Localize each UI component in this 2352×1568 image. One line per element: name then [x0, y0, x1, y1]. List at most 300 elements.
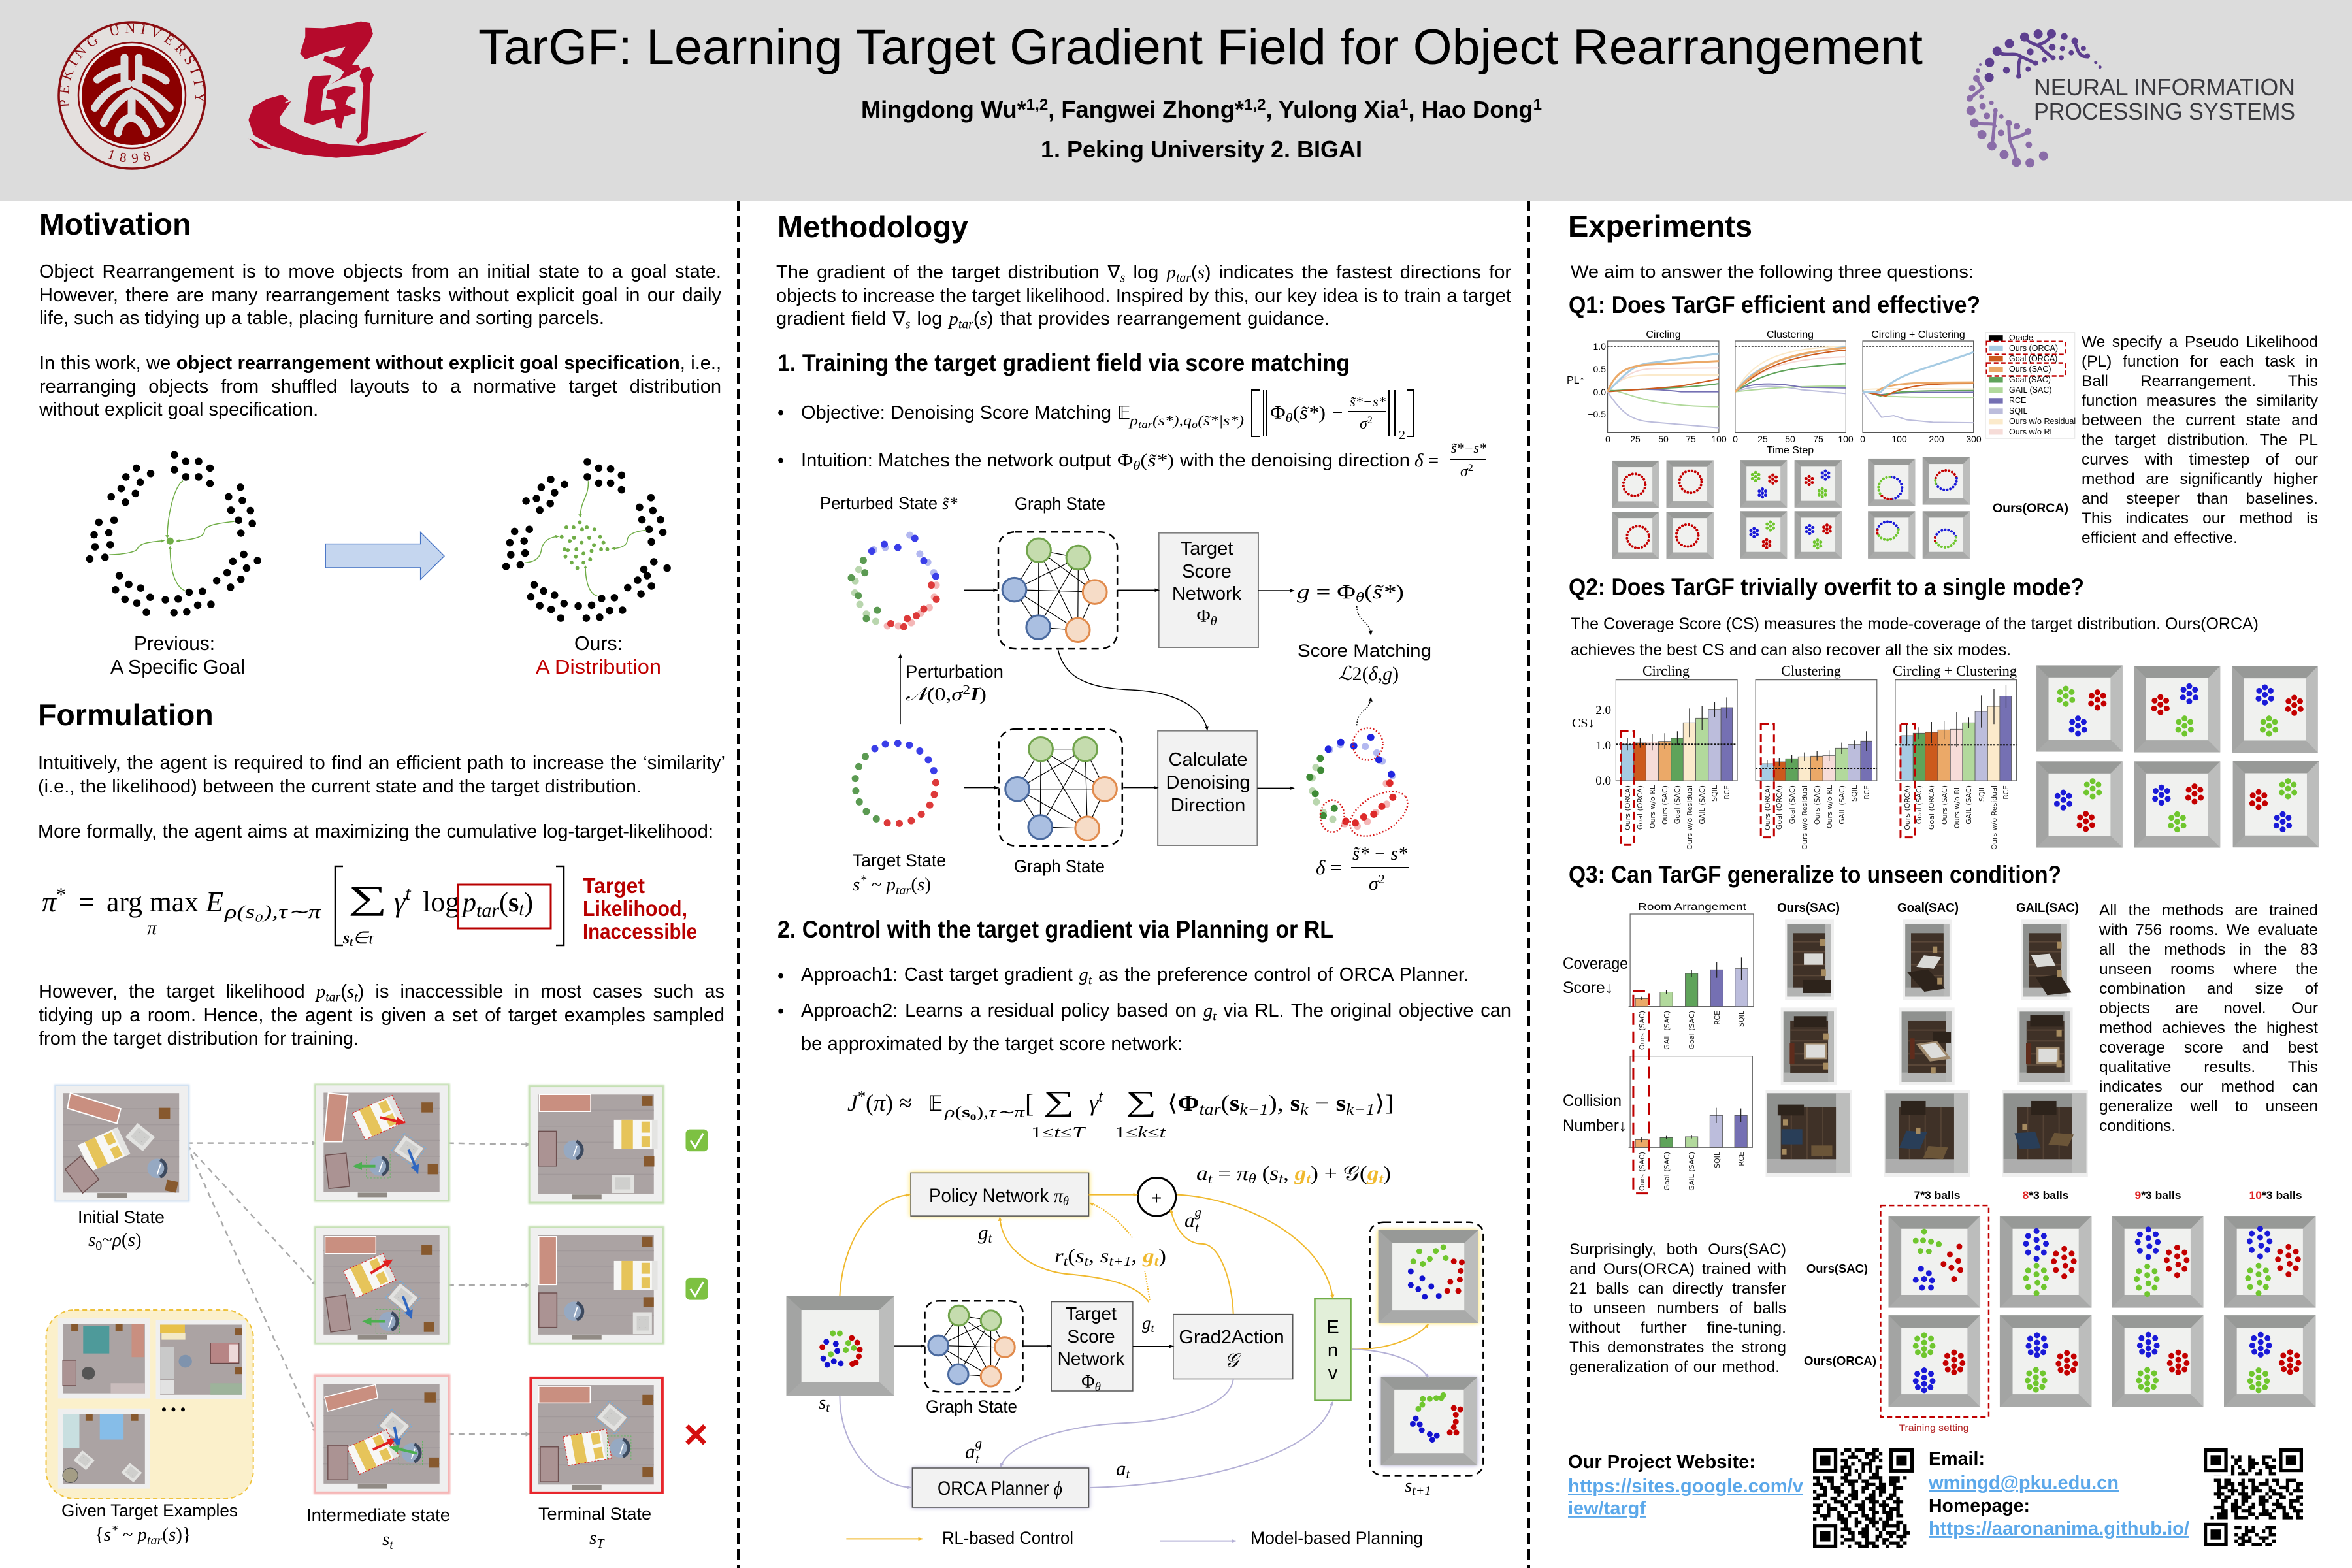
label: given target examples: * [111, 1523, 118, 1537]
bullet: intuition: 2 [1468, 463, 1473, 474]
figure: unseen ball numbers: Ours(ORCA) [1804, 1354, 1876, 1367]
affiliations: 1. Peking University 2. BIGAI [1041, 136, 1362, 163]
formula: objective: * [56, 884, 66, 906]
footer: email and homepage: Email: [1929, 1448, 1985, 1469]
chart: Q1 pseudo likelihood curves: 1.0 [1593, 341, 1606, 351]
authors: Mingdong Wu* [861, 96, 1025, 123]
chart: Q2 coverage score bars: RCE [1723, 785, 1731, 800]
formula: objective: ∑ [348, 879, 387, 916]
chart: Q1 pseudo likelihood curves: Ours w/o Residual [2009, 417, 2076, 426]
room: terminal success 1 [531, 1086, 662, 1202]
chart: Q3 room arrangement bars: Ours (SAC) [1638, 1011, 1646, 1050]
label: env [1326, 1317, 1339, 1384]
label: perturbed state: Perturbed State s̃* [820, 493, 957, 513]
chart: Q2 coverage score bars: Goal (SAC) [1915, 785, 1923, 824]
chart: Q1 pseudo likelihood curves: RCE [2009, 396, 2026, 405]
label: calculate denoising direction [1166, 749, 1250, 816]
chart: Q2 coverage score bars: Goal (ORCA) [1927, 785, 1936, 830]
text: Q1 paragraph: Ball Rearrangement. This [2082, 372, 2318, 390]
label: target state: tar [896, 883, 911, 898]
formula: J star: ∑ [1043, 1086, 1074, 1117]
formula: J star: ρ(s₀),τ∼π [944, 1104, 1025, 1121]
bullet: intuition: • [777, 450, 784, 471]
chart: Q1 pseudo likelihood curves: 25 [1757, 434, 1768, 444]
text: motivation paragraph 1: life, such as tidying up a table, placing furniture and sorting parcels. [39, 308, 604, 329]
label: gt: g [978, 1221, 988, 1244]
room: terminal success 2 [531, 1228, 662, 1343]
label: reward: , [1132, 1245, 1143, 1267]
formula: objective: arg max [106, 886, 199, 918]
authors: , Hao Dong [1408, 96, 1533, 123]
label: score matching: Score Matching [1298, 641, 1431, 661]
panel: right column, Experiments [1563, 209, 2319, 1548]
label: gt small: t [1151, 1322, 1155, 1335]
formula: delta: 2 [1379, 872, 1385, 887]
chart: Q2 coverage score bars: 0.0 [1595, 774, 1611, 788]
formula: J star: t [1098, 1088, 1103, 1105]
bullet: approach 1: • [777, 966, 784, 987]
formula: objective: t [519, 900, 525, 920]
text: formulation intro: Intuitively, the agent is required to find an efficient path to increase the ‘similarity’ [38, 753, 725, 774]
label: given target examples: tar [147, 1533, 162, 1548]
footer: project website [1568, 1452, 1803, 1519]
formula: objective: tar [476, 900, 499, 921]
chart: Q2 coverage score bars: Ours w/o RL [1825, 785, 1834, 828]
footer: email and homepage: https://aaronanima.github.io/ [1929, 1518, 2189, 1539]
label: reward: ( [1068, 1245, 1075, 1267]
text: Q3 paragraph: conditions. [2099, 1117, 2176, 1135]
text: motivation paragraph 1: Object Rearrangement is to move objects from an initial state to a goal state. [39, 261, 721, 282]
label: score matching: ℒ2(δ,g) [1338, 663, 1399, 685]
formula: objective: π [147, 917, 157, 939]
label: grad2action [1179, 1327, 1284, 1371]
text: Q1 paragraph: efficient and effective. [2082, 529, 2238, 547]
chart: Q1 pseudo likelihood curves: Clustering [1767, 329, 1814, 340]
label: reward: ) [1158, 1245, 1166, 1267]
label: terminal state: Terminal State [538, 1504, 651, 1524]
text: Q3 paragraph: combination and size of [2099, 980, 2318, 998]
chart: Q3 room arrangement bars: GAIL (SAC) [1663, 1011, 1671, 1050]
figure: unseen ball numbers: 7*3 balls [1914, 1189, 1960, 1201]
figure: Q3 3D room results: Ours(SAC) [1777, 901, 1840, 915]
chart: Q2 coverage score bars: RCE [2002, 785, 2010, 800]
callout: target likelihood inaccessible: Inaccessible [583, 919, 697, 943]
formula: action: θ [1249, 1171, 1256, 1186]
chart: Q2 coverage score bars: Ours w/o RL [1953, 785, 1961, 828]
label: reward: , [1088, 1245, 1100, 1267]
box: target score network [1051, 1302, 1133, 1391]
chart: Q2 coverage score bars: GAIL (SAC) [1698, 785, 1707, 825]
bullet: objective: 2 [1367, 415, 1373, 426]
text: Q3 paragraph: All the methods are trained [2099, 902, 2318, 919]
bullet: intuition: σ [1460, 463, 1468, 480]
graph state: target [999, 729, 1122, 846]
text: motivation paragraph 2: without explicit goal specification. [39, 399, 318, 420]
formula: objective: s [343, 928, 350, 947]
room row 1 [1785, 919, 2072, 1000]
formula: J star: s [1290, 1090, 1300, 1116]
bullet: intuition: θ [1133, 459, 1141, 473]
chart: Q1 pseudo likelihood curves: Oracle [2009, 333, 2033, 342]
chart: Q3 room arrangement bars: Room Arrangement [1638, 902, 1747, 913]
label: env: v [1328, 1363, 1338, 1384]
arrows: dashed transitions [187, 1143, 530, 1434]
legend: model-based planning: Model-based Planning [1250, 1528, 1423, 1548]
chart: Q1 pseudo likelihood curves: 75 [1813, 434, 1823, 444]
text: however paragraph [39, 980, 725, 1053]
authors: 1,2 [1026, 96, 1048, 114]
figure: unseen ball numbers [1804, 1189, 2316, 1433]
label: target score network: Φ [1196, 606, 1211, 627]
label: reward: g [1142, 1245, 1160, 1269]
label: perturbation: I [970, 684, 981, 705]
room: intermediate failure [316, 1377, 448, 1492]
label: initial state [78, 1207, 165, 1253]
chart: Q2 coverage score bars: Ours (ORCA) [1903, 785, 1912, 830]
label: calculate denoising direction: Calculate [1169, 749, 1247, 770]
chart: Q1 pseudo likelihood curves: GAIL (SAC) [2009, 385, 2052, 395]
room: next state RL [1379, 1230, 1478, 1323]
logo: NeurIPS: PROCESSING SYSTEMS [2034, 98, 2295, 125]
figure: Q1 ball rooms [1612, 457, 2068, 559]
chart: Q2 coverage score bars: Ours (SAC) [1661, 785, 1669, 825]
text: Q3 paragraph: all the methods in the 83 [2099, 941, 2318, 958]
label: target state: s) [917, 874, 931, 895]
label: previous: Previous: [134, 632, 215, 655]
text: Q2 description [1571, 615, 2259, 659]
text: surprisingly paragraph: 21 balls can directly transfer [1569, 1280, 1786, 1298]
chart: Q1 pseudo likelihood curves: 100 [1711, 434, 1727, 444]
label: target score network: Score [1182, 561, 1232, 582]
bullet: intuition: with the denoising direction [1179, 450, 1410, 471]
label: gt small: g [1142, 1313, 1151, 1333]
authors: , Yulong Xia [1266, 96, 1400, 123]
label: target score network small: Score [1067, 1326, 1115, 1347]
label: reward: t [1064, 1254, 1068, 1269]
text: motivation paragraph 1: However, there are many rearrangement tasks without explicit goal in our daily [39, 285, 721, 306]
chart: Q1 pseudo likelihood curves [1567, 329, 2076, 456]
chart: Q3 room arrangement bars: RCE [1713, 1011, 1722, 1025]
diagram: ours distribution dots [506, 462, 667, 678]
text: formulation intro [38, 752, 725, 801]
header band [0, 0, 2352, 201]
bullet: approach 2 [777, 1000, 1513, 1058]
label: given target examples [61, 1501, 238, 1548]
label: orca planner: ORCA Planner ϕ [938, 1478, 1062, 1499]
icon: QR code homepage [2204, 1448, 2303, 1546]
chart: Q3 room arrangement bars [1563, 902, 1754, 1194]
text: surprisingly paragraph: to unseen numbers of balls [1569, 1299, 1786, 1317]
bullet: objective: − [1332, 402, 1343, 423]
footer: project website: https://sites.google.com/v [1568, 1476, 1803, 1497]
text: motivation paragraph 2: In this work, we object rearrangement without explicit goal specification, i.e., [39, 353, 721, 374]
label: target state: ( [911, 874, 917, 895]
chart: Q1 pseudo likelihood curves: Goal (ORCA) [2009, 354, 2057, 363]
formula: J star: − [1308, 1090, 1336, 1116]
arrows: model-based planning [840, 1349, 1428, 1488]
label: initial state: ~ [102, 1230, 112, 1250]
figure: Q2 six modes rooms [2036, 665, 2319, 848]
text: however paragraph: from the target distribution for training. [39, 1028, 359, 1049]
formula: J star: ( [1221, 1090, 1230, 1116]
chart: Q1 pseudo likelihood curves: 300 [1966, 434, 1982, 444]
label: action g bottom: t [975, 1451, 980, 1467]
text: Q2 description: The Coverage Score (CS) measures the mode-coverage of the target distribution. Ours(ORCA) [1571, 615, 2259, 633]
label: target score network: Network [1172, 583, 1242, 604]
chart: Q1 pseudo likelihood curves: −0.5 [1588, 409, 1606, 419]
text: Q3 paragraph: with 756 rooms. We evaluate [2099, 921, 2318, 939]
bullet: objective: s̃*) [1299, 402, 1325, 423]
text: Q1 paragraph: function measures the similarity [2082, 392, 2318, 410]
label: ours: A Distribution [536, 655, 661, 678]
legend box [1985, 333, 2075, 438]
formula: J star: 𝔼 [928, 1091, 943, 1116]
label: target state: s [853, 874, 860, 895]
label: grad2action: Grad2Action [1179, 1327, 1284, 1348]
label: st: s [819, 1392, 826, 1413]
formula: delta: σ [1369, 873, 1379, 894]
label: action g bottom: a [965, 1440, 975, 1463]
text: Q1 paragraph: the target distribution. The PL [2082, 431, 2318, 449]
diagram: previous specific goal dots [90, 455, 257, 678]
label: target score network small: Target [1066, 1303, 1117, 1324]
bullet: approach 2: be approximated by the target score network: [801, 1034, 1183, 1054]
label: given target examples: {s [95, 1524, 111, 1545]
figure: unseen ball numbers: Ours(SAC) [1806, 1262, 1868, 1275]
footer: project website: Our Project Website: [1568, 1452, 1756, 1473]
label: g equation: g = Φ [1297, 580, 1347, 603]
chart: Q1 pseudo likelihood curves: Goal (SAC) [2009, 375, 2051, 384]
text: however paragraph: tidying up a room. Hence, the agent is given a set of target examples sampled [39, 1005, 725, 1026]
chart: Q1 pseudo likelihood curves: 0 [1860, 434, 1865, 444]
formula: action: π [1237, 1162, 1247, 1184]
bullet: objective: s̃*−s* [1350, 393, 1386, 410]
figure: Q3 3D room results: Goal(SAC) [1897, 901, 1959, 915]
chart: Q1 pseudo likelihood curves: 0.5 [1593, 364, 1606, 374]
formula: action: ) + 𝒢( [1311, 1162, 1367, 1184]
authors: , Fangwei Zhong* [1048, 96, 1244, 123]
authors: 1 [1399, 96, 1408, 114]
text: methodology intro [776, 261, 1511, 335]
chart: Q1 pseudo likelihood curves: Circling [1646, 329, 1681, 340]
heading: Q3: Q3: Can TarGF generalize to unseen condition? [1569, 861, 2061, 888]
room row 2 [1781, 1007, 2073, 1085]
chart: Q1 pseudo likelihood curves: 200 [1929, 434, 1944, 444]
label: env: n [1328, 1340, 1338, 1361]
formula: action: t [1306, 1171, 1311, 1186]
label: previous: A Specific Goal [110, 655, 245, 678]
chart: Q1 pseudo likelihood curves: 50 [1658, 434, 1669, 444]
text: Q3 paragraph: qualitative results. This [2099, 1058, 2318, 1076]
label: target state [853, 851, 946, 898]
label: policy network: θ [1063, 1194, 1069, 1209]
chart: Q2 coverage score bars: Circling + Clustering [1893, 662, 2017, 679]
label: st: t [826, 1401, 830, 1415]
graph state [925, 1301, 1023, 1392]
heading: Experiments: Experiments [1568, 209, 1752, 243]
text: motivation paragraph 2: rearranging objects from shuffled layouts to a normative target distribution [39, 376, 721, 397]
bullet: approach 2: Approach2: Learns a residual policy based on gt via RL. The original objective can [801, 1000, 1511, 1024]
text: Q1 paragraph: method are significantly higher [2082, 470, 2318, 488]
label: reward: t+1 [1109, 1254, 1132, 1269]
label: terminal state: T [596, 1537, 605, 1551]
text: Q3 paragraph: generalize well to unseen [2099, 1098, 2318, 1115]
label: at: t [1126, 1466, 1130, 1482]
label: graph state: Graph State [926, 1397, 1017, 1416]
bullet: intuition: s̃*−s* [1451, 440, 1486, 456]
label: policy network: Policy Network π [929, 1185, 1064, 1207]
formula: objective [42, 866, 564, 949]
formula: action: ) [1383, 1162, 1391, 1184]
chart: Q2 coverage score bars: GAIL (SAC) [1838, 785, 1846, 825]
formula: action: t [1279, 1171, 1284, 1186]
text: surprisingly paragraph: Surprisingly, both Ours(SAC) [1569, 1241, 1786, 1258]
chart: Q2 coverage score bars: Clustering [1781, 662, 1841, 679]
label: target state: Target State [853, 851, 946, 870]
text: however paragraph: However, the target likelihood ptar(st) is inaccessible in most cases such as [39, 981, 725, 1005]
title: TarGF: Learning Target Gradient Field for Object Rearrangement [478, 20, 1923, 75]
callout: target likelihood inaccessible: Likelihood, [583, 896, 687, 921]
arrows: black flow [894, 1345, 1173, 1347]
room: initial state [56, 1086, 188, 1200]
label: graph state top: Graph State [1015, 494, 1105, 514]
chart: Q2 coverage score bars: SQIL [1850, 785, 1859, 802]
text: more formally: More formally, the agent aims at maximizing the cumulative log-target-likelihood: [38, 821, 713, 842]
figure: unseen ball numbers: 9*3 balls [2135, 1189, 2181, 1201]
arrow: previous to ours [325, 532, 444, 580]
formula: objective: π [42, 886, 56, 918]
label: given target examples: Given Target Examples [61, 1501, 238, 1520]
footer: project website: iew/targf [1568, 1498, 1646, 1519]
chart: Q1 pseudo likelihood curves: Ours (ORCA) [2009, 344, 2058, 353]
text: surprisingly paragraph: This demonstrates the strong [1569, 1339, 1786, 1356]
formula: J star: [ [1025, 1088, 1034, 1118]
heading: training section: 1. Training the target gradient field via score matching [777, 350, 1350, 376]
chart: Q1 pseudo likelihood curves: Ours (SAC) [2009, 365, 2051, 374]
label: given target examples: ~ p [118, 1524, 147, 1545]
formula: J star: ∑ [1126, 1086, 1156, 1117]
chart: Q2 coverage score bars: Ours (ORCA) [1763, 785, 1772, 830]
chart: Q2 coverage score bars: Goal (SAC) [1788, 785, 1797, 824]
label: given target examples: s)} [169, 1524, 191, 1545]
label: action g top: t [1195, 1220, 1200, 1235]
label: target score network: θ [1211, 614, 1217, 629]
text: Q3 paragraph: objects are novel. Our [2099, 1000, 2318, 1017]
formula: delta: δ = [1316, 856, 1342, 879]
logo: red calligraphy [248, 22, 427, 158]
chart: Q3 room arrangement bars: SQIL [1737, 1010, 1746, 1027]
figure: Q3 3D room results [1765, 901, 2088, 1177]
label: target state: ~ p [866, 874, 896, 895]
bullet: objective: • [777, 402, 784, 423]
room: intermediate success 2 [316, 1228, 448, 1343]
figure: unseen ball numbers: 8*3 balls [2023, 1189, 2068, 1201]
panel: given target examples [46, 1310, 253, 1499]
footer: email and homepage: Homepage: [1929, 1495, 2030, 1516]
chart: Q3 room arrangement bars: GAIL (SAC) [1688, 1152, 1696, 1191]
chart: Q2 coverage score bars: Goal (ORCA) [1775, 785, 1784, 830]
formula: objective: E [205, 886, 223, 918]
formula: objective: ρ(s₀),τ∼π [224, 902, 322, 923]
chart: Q3 room arrangement bars: Number↓ [1563, 1117, 1627, 1135]
text: motivation paragraph 2 [39, 352, 721, 424]
chart: Q3 room arrangement bars: Goal (SAC) [1688, 1011, 1696, 1049]
figure: unseen ball numbers: 10*3 balls [2249, 1189, 2302, 1201]
room: next state planning [1380, 1377, 1477, 1465]
label: st+1: s [1405, 1475, 1412, 1496]
box: calculate denoising direction [1158, 731, 1257, 845]
chart: Q1 pseudo likelihood curves: 75 [1686, 434, 1696, 444]
label: reward: r [1054, 1245, 1062, 1267]
text: Q3 paragraph: indicates our method can [2099, 1078, 2318, 1096]
bullet: intuition: s̃*) [1147, 450, 1173, 471]
chart: Q3 room arrangement bars: Coverage [1563, 955, 1628, 973]
label: target score network: Target [1181, 538, 1233, 559]
chart: Q1 pseudo likelihood curves: 100 [1891, 434, 1907, 444]
text: three questions: We aim to answer the following three questions: [1571, 262, 1974, 282]
formula: delta [1316, 843, 1409, 894]
formula: objective: p [463, 888, 476, 918]
logo: Peking University seal: 1898 [108, 150, 150, 163]
chart: Q1 pseudo likelihood curves: Time Step [1767, 445, 1814, 456]
label: reward: s [1100, 1245, 1107, 1267]
label: terminal state [538, 1504, 651, 1551]
chart: Q2 coverage score bars: CS↓ [1572, 716, 1594, 730]
chart: Q2 coverage score bars: Ours w/o Residual [1801, 785, 1809, 850]
bullet: intuition [777, 440, 1486, 480]
formula: action: a [1196, 1162, 1206, 1184]
label: target score network small [1058, 1303, 1125, 1394]
label: intermediate state: Intermediate state [306, 1505, 450, 1525]
bullet: intuition: ( [1140, 450, 1147, 471]
label: perturbation: Perturbation [906, 662, 1004, 681]
bullet: objective: 𝔼 [1117, 402, 1130, 423]
bullet: objective: σ [1192, 419, 1199, 431]
figure: room rearrangement examples [46, 1085, 708, 1552]
bullet: intuition: Intuition: Matches the network output [801, 450, 1111, 471]
label: initial state: 0 [95, 1239, 102, 1253]
logo: NeurIPS: NEURAL INFORMATION [2034, 74, 2295, 101]
text: Q3 paragraph: unseen rooms where the [2099, 960, 2318, 978]
text: surprisingly paragraph: without further fine-tuning. [1569, 1319, 1786, 1337]
icon: QR code project website [1813, 1448, 1914, 1548]
label: initial state: ρ(s) [112, 1230, 142, 1250]
chart: Q1 pseudo likelihood curves: 50 [1785, 434, 1795, 444]
chart: Q3 room arrangement bars: RCE [1737, 1152, 1746, 1166]
formula: J star: 1≤ t≤T [1031, 1124, 1086, 1141]
label: Ours(ORCA): Ours(ORCA) [1993, 502, 2068, 515]
label: grad2action: 𝒢 [1224, 1350, 1241, 1371]
callout: target likelihood inaccessible: Target [583, 874, 645, 898]
room: terminal failure [531, 1378, 662, 1493]
heading: control section: 2. Control with the target gradient via Planning or RL [777, 916, 1333, 943]
label: action g top: a [1184, 1209, 1194, 1232]
heading: Methodology: Methodology [777, 210, 968, 244]
node: plus [1138, 1177, 1176, 1216]
formula: action: s [1269, 1162, 1278, 1184]
icon: cross [687, 1426, 705, 1443]
label: target score network small: θ [1095, 1380, 1101, 1394]
box: grad2action [1173, 1315, 1293, 1379]
chart: Q2 coverage score bars: Ours w/o RL [1648, 785, 1657, 828]
figure: Q3 3D room results: GAIL(SAC) [2016, 901, 2079, 915]
text: Q1 paragraph: We specify a Pseudo Likelihood [2082, 333, 2318, 351]
formula: J star: k−1 [1239, 1102, 1269, 1119]
text: Q1 paragraph: curves with timestep of our [2082, 451, 2318, 468]
text: Q1 paragraph: (PL) function for each task in [2082, 353, 2318, 370]
text: formulation intro: (i.e., the likelihood) between the current state and the target distribution. [38, 776, 642, 797]
bullet: objective [777, 390, 1414, 442]
